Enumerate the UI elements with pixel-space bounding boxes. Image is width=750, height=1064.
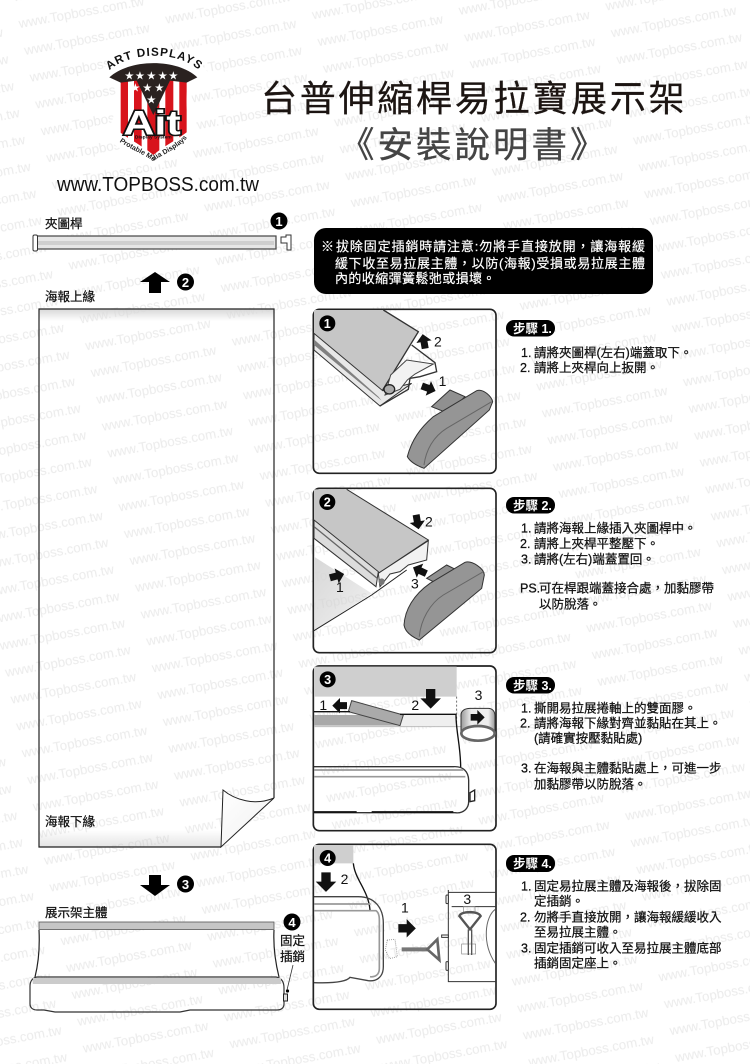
arrow: push cap in — [410, 560, 430, 581]
badge 4: 4 — [288, 915, 296, 930]
step 1 heading pill — [506, 320, 555, 336]
step 4 instructions: 固定插銷可收入至易拉展主體底部 — [534, 940, 722, 956]
label: poster top edge: 海報上緣 — [45, 289, 96, 304]
badge: step number 2 — [319, 494, 335, 510]
banner stand body — [30, 922, 284, 1012]
step 4 instructions: 3. — [521, 942, 531, 956]
badge 3: 3 — [182, 877, 189, 892]
arrow: press poster down — [420, 689, 441, 709]
step 2 instructions: PS. — [520, 582, 540, 596]
step 1 instructions: 請將夾圖桿(左右)端蓋取下。 — [534, 345, 692, 360]
step 4 heading pill — [506, 855, 555, 872]
poster sheet — [39, 309, 274, 847]
callout numbers: 2 — [341, 871, 349, 887]
step 2 instructions: 2. — [520, 537, 530, 551]
label: stand body: 展示架主體 — [45, 906, 108, 920]
panel: step 1 illustration — [313, 309, 496, 473]
step 1 heading pill: 步驟 1. — [513, 321, 552, 336]
step 3 instructions: 請將海報下緣對齊並黏貼在其上。 — [534, 716, 722, 730]
badge: step number 4: 4 — [324, 852, 331, 866]
callout numbers: 1 — [336, 579, 344, 595]
callout numbers — [319, 687, 483, 713]
step 3 instructions — [520, 700, 722, 792]
callout numbers — [341, 871, 471, 915]
logo: Art Displays shield: ★ — [130, 81, 140, 95]
warning box: 內的收縮彈簧鬆弛或損壞。 — [335, 271, 496, 286]
step 4 instructions: 至易拉展主體。 — [534, 924, 622, 940]
arrow: lower poster — [316, 872, 336, 892]
label: locking pin: 插銷 — [280, 949, 305, 964]
step 3 instructions: 撕開易拉展捲軸上的雙面膠。 — [534, 700, 697, 716]
step 2 instructions: 請將上夾桿平整壓下。 — [534, 536, 659, 551]
step 2 instructions: 以防脫落。 — [539, 596, 602, 612]
step 4 instructions: 勿將手直接放開，讓海報緩緩收入 — [534, 910, 722, 924]
warning box: 拔除固定插銷時請注意:勿將手直接放開，讓海報緩 — [336, 239, 645, 254]
arrow: lift top clip — [415, 333, 433, 350]
step 4 instructions: 2. — [520, 910, 530, 924]
callout numbers: 2 — [425, 514, 433, 530]
badge: step number 3 — [320, 671, 336, 687]
step 2 instructions: 1. — [521, 522, 531, 536]
step 2 heading pill — [506, 497, 555, 514]
logo: Art Displays shield: ★ — [146, 68, 156, 82]
arrow: roll direction — [471, 710, 485, 725]
arrow: insert poster — [328, 567, 346, 585]
callout numbers: 1 — [319, 697, 327, 713]
step 4 instructions: 定插銷。 — [534, 894, 584, 908]
panel: step 3 illustration — [313, 666, 496, 831]
callout numbers: 3 — [463, 891, 471, 907]
badge 2: 2 — [182, 275, 189, 290]
badge: step number 1: 1 — [324, 317, 331, 331]
badge: step number 2: 2 — [324, 496, 331, 510]
step 2 heading pill: 步驟 2. — [513, 498, 552, 513]
callout numbers: 1 — [401, 899, 409, 915]
step 3 instructions: 1. — [521, 702, 531, 716]
step 4 instructions: 插銷固定座上。 — [534, 956, 622, 970]
logo: Art Displays shield: ★ — [146, 92, 156, 106]
badge 3 — [177, 876, 194, 892]
panel: step 4 illustration — [313, 844, 496, 1009]
step 3 instructions: 在海報與主體黏貼處上，可進一步 — [534, 760, 722, 776]
callout numbers — [336, 514, 433, 595]
callout numbers: 3 — [411, 575, 419, 591]
arrow: remove cap — [419, 379, 438, 398]
logo: Art Displays shield: Protable Media Displays — [120, 136, 186, 161]
step 1 instructions: 2. — [520, 361, 530, 375]
badge 4 — [284, 914, 300, 930]
website URL: www.TOPBOSS.com.tw — [56, 174, 260, 196]
step 2 instructions — [520, 520, 714, 612]
step 1 instructions — [520, 345, 692, 375]
callout numbers: 2 — [434, 334, 442, 350]
logo: Art Displays shield — [104, 48, 208, 167]
logo: Art Displays shield: Ait — [123, 104, 181, 142]
step 2 instructions: 請將(左右)端蓋置回。 — [534, 552, 655, 566]
step 2 instructions: 請將海報上緣插入夾圖桿中。 — [534, 520, 697, 536]
step 4 heading pill: 步驟 4. — [513, 856, 552, 871]
step 2 instructions: 3. — [521, 552, 531, 566]
logo: Art Displays shield: ★ — [124, 68, 134, 82]
step 3 heading pill: 步驟 3. — [513, 678, 552, 693]
callout numbers: 3 — [475, 687, 483, 703]
callout numbers: 2 — [411, 697, 419, 713]
step 3 instructions: 3. — [521, 762, 531, 776]
arrow up — [140, 272, 170, 293]
panel: step 2 illustration — [313, 488, 496, 653]
title: 台普伸縮桿易拉寶展示架 — [261, 78, 687, 119]
step 2 instructions: 可在桿跟端蓋接合處，加黏膠帶 — [539, 580, 714, 596]
warning box: ※ — [321, 239, 334, 254]
step 3 heading pill — [506, 677, 555, 694]
step 3 instructions: 2. — [520, 716, 530, 730]
step 1 instructions: 請將上夾桿向上扳開。 — [534, 360, 659, 375]
logo: Art Displays shield: ★ — [142, 81, 152, 95]
arrow: peel tape — [332, 698, 347, 713]
badge 1: 1 — [275, 214, 283, 229]
label: clip rod: 夾圖桿 — [45, 216, 83, 231]
warning box: 緩下收至易拉展主體，以防(海報)受損或易拉展主體 — [335, 256, 645, 271]
step 3 instructions: (請確實按壓黏貼處) — [534, 730, 642, 746]
badge: step number 1 — [319, 315, 335, 331]
warning box — [314, 228, 653, 294]
step 4 instructions — [520, 878, 722, 970]
subtitle: 《安裝說明書》 — [339, 125, 609, 165]
step 1 instructions: 1. — [521, 346, 531, 360]
badge 2 — [177, 274, 194, 290]
badge 1 — [270, 212, 288, 230]
step 3 instructions: 加黏膠帶以防脫落。 — [534, 776, 647, 792]
label: locking pin: 固定 — [280, 933, 305, 948]
logo: Art Displays shield: ★ — [158, 68, 168, 82]
arrow: pull pin out — [398, 919, 416, 937]
logo: Art Displays shield: ★ — [135, 68, 145, 82]
badge: step number 3: 3 — [324, 673, 331, 687]
logo: Art Displays shield: ★ — [154, 81, 164, 95]
label: locking pin — [280, 933, 305, 964]
leader line to pin — [284, 965, 293, 1001]
arrow: press clip down — [409, 513, 426, 531]
step 4 instructions: 固定易拉展主體及海報後，拔除固 — [534, 878, 722, 894]
logo: Art Displays shield: ★ — [168, 68, 178, 82]
icon: clip rod with end caps — [33, 235, 291, 251]
step 4 instructions: 1. — [521, 880, 531, 894]
label: poster bottom edge: 海報下緣 — [45, 814, 96, 829]
arrow down — [140, 875, 170, 896]
callout numbers — [434, 334, 447, 389]
callout numbers: 1 — [439, 373, 447, 389]
logo: Art Displays shield: Display System — [135, 135, 172, 141]
logo: Art Displays shield: ART DISPLAYS — [107, 48, 202, 70]
badge: step number 4 — [320, 850, 336, 866]
